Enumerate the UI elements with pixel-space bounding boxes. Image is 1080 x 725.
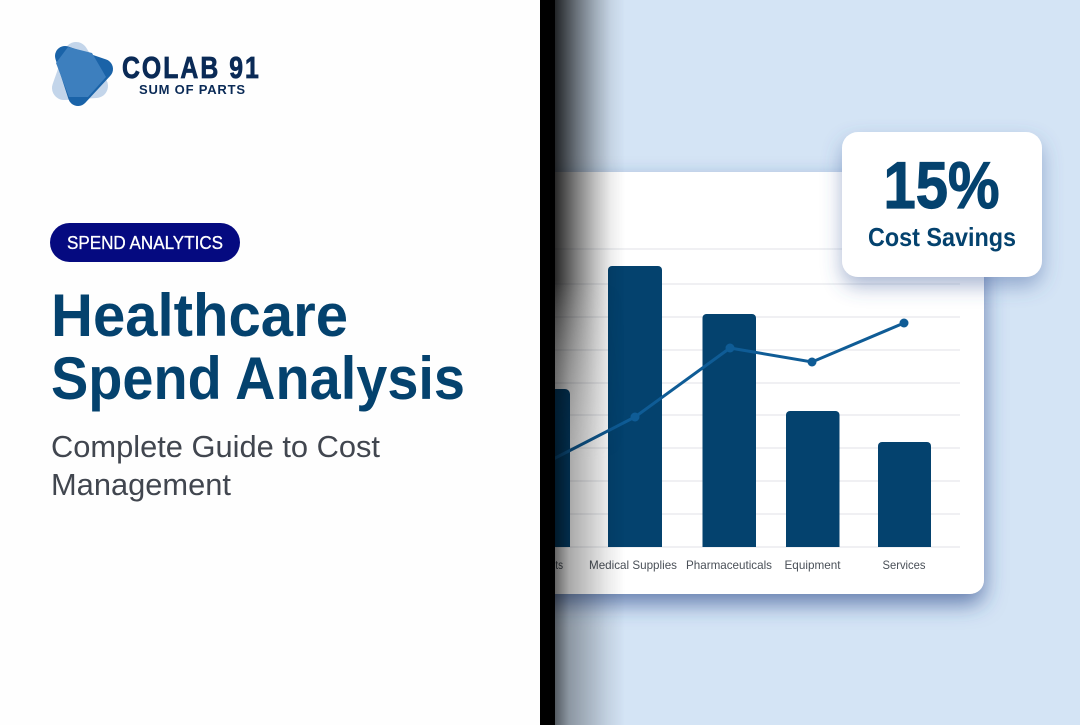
panel: chart card bbox=[500, 172, 984, 594]
panel: blue chart background bbox=[540, 0, 1080, 725]
logo icon bbox=[56, 47, 106, 97]
grid lines bbox=[555, 249, 960, 547]
tag: spend analytics: SPEND ANALYTICS bbox=[67, 233, 223, 253]
trend line bbox=[530, 318, 908, 471]
panel: left white panel bbox=[0, 0, 540, 725]
category labels bbox=[533, 558, 926, 572]
category labels: Equipment bbox=[784, 558, 841, 572]
subtitle: Management bbox=[51, 467, 231, 502]
bar chart bbox=[530, 266, 931, 547]
logo wordmark: COLAB 91 bbox=[122, 50, 259, 85]
category labels: Pharmaceuticals bbox=[686, 558, 772, 572]
badge value: 15% bbox=[884, 148, 1000, 222]
badge: cost savings bbox=[842, 132, 1042, 277]
panel: shadow divider bbox=[540, 0, 625, 725]
category labels: Services bbox=[882, 558, 926, 572]
category labels: Medical Supplies bbox=[589, 558, 677, 572]
logo tagline: SUM OF PARTS bbox=[139, 82, 245, 97]
tag: spend analytics bbox=[50, 223, 240, 262]
title: Healthcare bbox=[51, 282, 348, 349]
subtitle: Complete Guide to Cost bbox=[51, 429, 380, 464]
title: Spend Analysis bbox=[51, 345, 465, 412]
logo bbox=[56, 47, 259, 97]
title bbox=[51, 282, 465, 412]
subtitle bbox=[51, 429, 380, 502]
card surface bbox=[500, 172, 984, 594]
badge label: Cost Savings bbox=[868, 222, 1016, 252]
category labels: Clients bbox=[533, 558, 563, 572]
